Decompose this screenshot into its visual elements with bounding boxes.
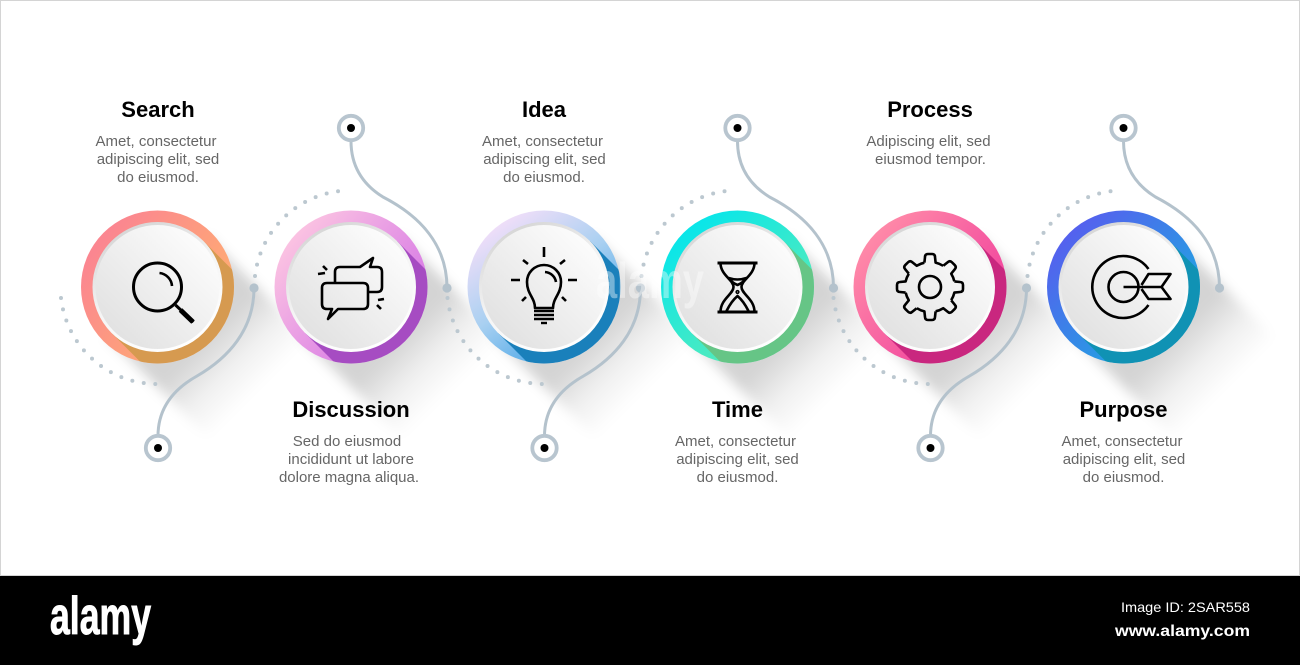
text block: idea: Idea bbox=[522, 97, 567, 122]
text block: time: Amet, consectetur bbox=[675, 433, 796, 450]
footer bar bbox=[0, 576, 1300, 665]
text block: process: Process bbox=[887, 97, 973, 122]
text block: purpose: Purpose bbox=[1079, 397, 1168, 422]
text block: search: Amet, consectetur bbox=[96, 133, 216, 150]
step 6 circle: purpose bbox=[1047, 210, 1254, 418]
website: www.alamy.com bbox=[1114, 623, 1250, 640]
text block: purpose: adipiscing elit, sed bbox=[1063, 451, 1185, 468]
text block: idea: adipiscing elit, sed bbox=[483, 151, 606, 168]
step 1 circle: search bbox=[81, 210, 288, 418]
text block: discussion: dolore magna aliqua. bbox=[279, 469, 419, 486]
connector 3: bottom node to step 4 bbox=[448, 283, 645, 460]
step 5 circle: process bbox=[854, 210, 1060, 418]
text block: process bbox=[866, 97, 991, 168]
text block: idea: do eiusmod. bbox=[503, 169, 585, 186]
connector 5: bottom node to step 6 bbox=[834, 283, 1031, 460]
text block: search: do eiusmod. bbox=[117, 169, 199, 186]
text block: idea bbox=[482, 97, 606, 186]
text block: discussion: Discussion bbox=[292, 397, 410, 422]
text block: process: eiusmod tempor. bbox=[875, 151, 986, 168]
text block: purpose: Amet, consectetur bbox=[1062, 433, 1182, 450]
text block: idea: Amet, consectetur bbox=[482, 133, 603, 150]
connector 1: bottom node to step 2 bbox=[61, 283, 259, 460]
text block: purpose bbox=[1062, 397, 1185, 486]
footer logo: alamy bbox=[50, 587, 151, 646]
text block: search: adipiscing elit, sed bbox=[97, 151, 219, 168]
text block: discussion: incididunt ut labore bbox=[288, 451, 414, 468]
icon: gear bbox=[897, 254, 963, 320]
icon: hourglass bbox=[718, 263, 758, 312]
image id: Image ID: 2SAR558 bbox=[1121, 599, 1250, 615]
text block: time: adipiscing elit, sed bbox=[676, 451, 799, 468]
text block: time bbox=[675, 397, 799, 486]
icon: light bulb bbox=[511, 247, 577, 323]
text block: purpose: do eiusmod. bbox=[1083, 469, 1164, 486]
connector 2: top node to step 3 bbox=[255, 116, 452, 293]
icon: target with arrow bbox=[1092, 256, 1170, 318]
text block: process: Adipiscing elit, sed bbox=[866, 133, 991, 150]
text block: time: do eiusmod. bbox=[697, 469, 778, 486]
text block: discussion bbox=[279, 397, 419, 486]
connector 6: top node to end point bbox=[1028, 116, 1224, 293]
step 4 circle: time bbox=[661, 210, 868, 418]
connector 4: top node to step 5 bbox=[642, 116, 838, 293]
text block: discussion: Sed do eiusmod bbox=[293, 433, 401, 450]
icon: magnifying glass bbox=[134, 263, 194, 322]
text block: search: Search bbox=[121, 97, 195, 122]
watermark: alamy bbox=[596, 253, 704, 309]
step 2 circle: discussion bbox=[274, 210, 481, 418]
text block: search bbox=[96, 97, 219, 186]
text block: time: Time bbox=[712, 397, 763, 422]
icon: speech bubbles bbox=[318, 258, 384, 319]
step 3 circle: idea bbox=[468, 210, 674, 418]
